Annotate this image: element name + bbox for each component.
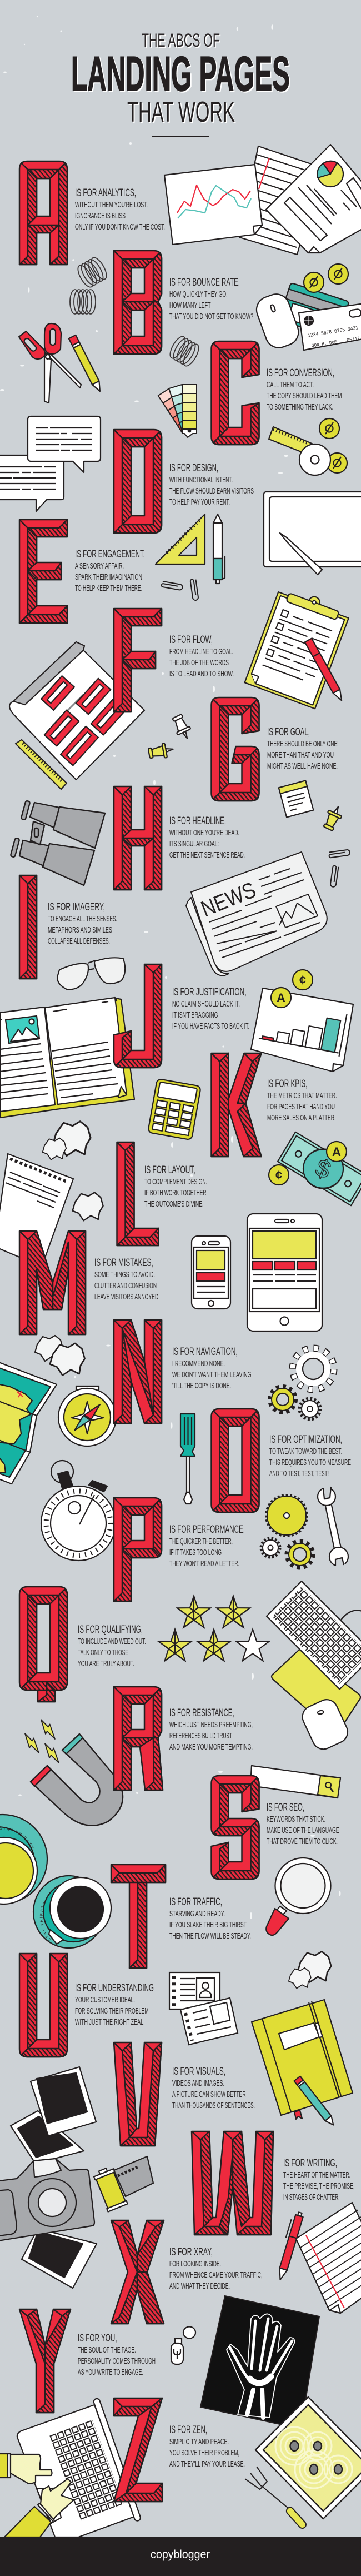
icons: polaroids xyxy=(11,2067,97,2288)
icon: magnifying glass xyxy=(266,1858,331,1935)
text: V: A PICTURE CAN SHOW BETTER xyxy=(172,2090,246,2099)
letter M xyxy=(19,1231,86,1334)
icon: red pencil xyxy=(305,639,345,702)
computer mouse xyxy=(253,291,302,351)
illustration: analytics papers xyxy=(164,145,361,255)
icon: large phone xyxy=(247,1214,322,1331)
text: L xyxy=(144,1164,207,1209)
text: B: HOW MANY LEFT xyxy=(169,301,211,310)
text: Q: TO INCLUDE AND WEED OUT. xyxy=(78,1637,146,1646)
title xyxy=(71,30,291,129)
text: C xyxy=(267,367,342,412)
icon: search bar xyxy=(250,1766,340,1798)
icons: crumpled paper xyxy=(35,1122,331,1989)
text: J xyxy=(172,986,249,1031)
text: G: IS FOR GOAL, xyxy=(267,726,310,738)
letter R xyxy=(114,1687,163,1790)
letter T xyxy=(111,1865,166,1968)
text: M: IS FOR MISTAKES, xyxy=(94,1257,153,1269)
text: I: TO ENGAGE ALL THE SENSES. xyxy=(48,915,117,924)
icon: film roll xyxy=(93,2156,153,2212)
text: F: IS FOR FLOW, xyxy=(169,634,213,646)
text: Y: IS FOR YOU, xyxy=(78,2333,117,2344)
icon: wrench xyxy=(318,1485,348,1568)
icon: tape measure with coins xyxy=(269,418,347,475)
letter E xyxy=(19,520,67,623)
text: V: IS FOR VISUALS, xyxy=(172,2066,225,2077)
back bubble xyxy=(0,455,64,511)
text: Y: THE SOUL OF THE PAGE. xyxy=(78,2346,136,2355)
text: P: THE QUICKER THE BETTER. xyxy=(169,1537,233,1546)
text: Q: TALK ONLY TO THOSE xyxy=(78,1648,128,1657)
mouse pad xyxy=(272,1650,360,1723)
text: A: ONLY IF YOU DON'T KNOW THE COST. xyxy=(75,223,165,232)
icon: lightning bolts xyxy=(25,1717,59,1765)
text: D xyxy=(169,462,254,507)
text: J: NO CLAIM SHOULD LACK IT. xyxy=(172,1000,240,1009)
icon: magnet xyxy=(31,1734,123,1826)
text: Q: YOU ARE TRULY ABOUT. xyxy=(78,1660,134,1668)
letter D xyxy=(114,430,162,533)
text: W xyxy=(283,2158,354,2202)
icon: set square xyxy=(156,514,205,564)
icon: speech bubbles xyxy=(0,416,101,511)
icon: springs xyxy=(70,255,202,368)
text: P: IF IT TAKES TOO LONG xyxy=(169,1548,222,1557)
icon: bar chart document xyxy=(251,970,353,1072)
letter A xyxy=(19,161,67,265)
text: D: THE FLOW SHOULD EARN VISITORS xyxy=(169,487,254,496)
text: V xyxy=(172,2066,255,2110)
text: Y: PERSONALITY COMES THROUGH xyxy=(78,2357,156,2366)
text: U xyxy=(75,1982,154,2027)
icon: tea cup: STAY THIRSTY xyxy=(0,1827,34,1847)
icon: gears xyxy=(262,1348,334,1567)
letter X xyxy=(111,2220,164,2324)
text: Q xyxy=(78,1624,146,1668)
icon: tablet and stylus xyxy=(264,492,361,575)
text: D: IS FOR DESIGN, xyxy=(169,462,218,474)
text: S xyxy=(267,1802,339,1846)
icon: screwdriver xyxy=(180,1414,195,1504)
icon: rating stars xyxy=(158,1596,269,1661)
text: K: IS FOR KPIS, xyxy=(267,1078,308,1090)
text: Z: IS FOR ZEN, xyxy=(169,2424,207,2436)
text: H xyxy=(169,815,245,860)
icon: coffee cup: STAY THIRSTY xyxy=(40,1902,51,1941)
credit card: 05/17 xyxy=(347,336,360,343)
icon: note xyxy=(279,780,313,818)
text: L: THE OUTCOME'S DIVINE. xyxy=(144,1200,203,1209)
text: B: HOW QUICKLY THEY GO. xyxy=(169,290,228,299)
icon: tea cup xyxy=(0,1814,48,1905)
text: M: SOME THINGS TO AVOID. xyxy=(94,1270,155,1279)
text: F: THE JOB OF THE WORDS xyxy=(169,659,229,667)
footer: copyblogger xyxy=(151,2548,210,2561)
cable xyxy=(339,1611,361,1623)
front bubble xyxy=(28,416,101,472)
letter K xyxy=(211,1053,261,1157)
icon: pen xyxy=(213,514,225,584)
lined paper xyxy=(239,146,344,255)
text: R: AND MAKE YOU MORE TEMPTING. xyxy=(169,1743,253,1752)
text: P: THEY WON'T READ A LETTER. xyxy=(169,1559,239,1568)
text: Q: IS FOR QUALIFYING, xyxy=(78,1624,143,1636)
letter Y xyxy=(19,2309,71,2413)
text: A: IS FOR ANALYTICS, xyxy=(75,187,136,199)
icon: bar chart document: ¢ xyxy=(299,973,306,987)
icon: usb stick xyxy=(171,2339,183,2364)
text: T: IF YOU SLAKE THEIR BIG THIRST xyxy=(169,1921,247,1930)
mouse xyxy=(299,1696,352,1753)
text: B: IS FOR BOUNCE RATE, xyxy=(169,277,240,288)
icon: plate of noodles xyxy=(255,2397,361,2519)
icon: laptop xyxy=(17,2398,141,2537)
letter O xyxy=(211,1409,259,1512)
letter Z xyxy=(114,2398,162,2502)
text: T: THEN THE FLOW WILL BE STEADY. xyxy=(169,1932,251,1941)
line chart paper xyxy=(164,165,262,245)
text: C: CALL THEM TO ACT. xyxy=(267,381,314,390)
title: THE ABCS OF xyxy=(143,31,221,52)
icon: fork xyxy=(245,2467,308,2530)
icon: stopwatch xyxy=(41,1461,116,1561)
letter J xyxy=(114,964,162,1068)
text: Z: YOU SOLVE THEIR PROBLEM, xyxy=(169,2449,239,2458)
text: L: IS FOR LAYOUT, xyxy=(144,1164,195,1176)
icon: yellow pencil xyxy=(69,335,103,393)
text: D: WITH FUNCTIONAL INTENT. xyxy=(169,476,233,485)
text: K xyxy=(267,1078,337,1123)
text: R: WHICH JUST NEEDS PREEMPTING, xyxy=(169,1721,253,1730)
text: F xyxy=(169,634,234,679)
text: I: METAPHORS AND SIMILES xyxy=(48,926,112,935)
text: M: LEAVE VISITORS ANNOYED. xyxy=(94,1293,160,1302)
text: E xyxy=(75,549,145,593)
text: R xyxy=(169,1707,253,1752)
icon: small phone xyxy=(192,1236,230,1309)
text: A: IGNORANCE IS BLISS xyxy=(75,212,126,221)
letter I xyxy=(19,875,37,979)
title: THE ABCS OF xyxy=(142,30,220,51)
icon: treasure map xyxy=(0,1362,57,1484)
text: E: A SENSORY AFFAIR. xyxy=(75,562,124,571)
text: I xyxy=(48,901,117,946)
coins xyxy=(304,264,348,292)
icon: lined paper xyxy=(296,2203,361,2313)
teal card xyxy=(279,283,349,338)
text: L: IF BOTH WORK TOGETHER xyxy=(144,1189,207,1198)
text: V: VIDEOS AND IMAGES. xyxy=(172,2079,224,2088)
letter L xyxy=(117,1142,159,1245)
icon: notepad xyxy=(0,1154,73,1258)
icon: binoculars xyxy=(11,801,105,885)
text: H: GET THE NEXT SENTENCE READ. xyxy=(169,851,245,860)
icon: red pen xyxy=(274,2211,304,2281)
letter H xyxy=(114,786,162,890)
icon: cards mouse and coins xyxy=(253,264,361,351)
text: U: WITH JUST THE RIGHT ZEAL. xyxy=(75,2018,145,2027)
text: P xyxy=(169,1524,245,1568)
text: L: TO COMPLEMENT DESIGN. xyxy=(144,1178,207,1187)
letter B xyxy=(114,251,162,354)
icon: saw blade xyxy=(267,1496,306,1535)
keyboard xyxy=(267,1581,361,1690)
text: U: FOR SOLVING THEIR PROBLEM xyxy=(75,2007,149,2016)
icon: dollar bill: ¢ xyxy=(275,1168,282,1182)
text: E: SPARK THEIR IMAGINATION xyxy=(75,573,142,582)
icon: compass xyxy=(58,1386,116,1446)
text: V: THAN THOUSANDS OF SENTENCES. xyxy=(172,2101,255,2110)
text: E: TO HELP KEEP THEM THERE. xyxy=(75,584,142,593)
letter P xyxy=(114,1498,162,1601)
text: J: IF YOU HAVE FACTS TO BACK IT. xyxy=(172,1022,249,1031)
icon: clipboard xyxy=(245,584,352,709)
text: E: IS FOR ENGAGEMENT, xyxy=(75,549,145,560)
text: Z: SIMPLICITY AND PEACE. xyxy=(169,2438,229,2447)
letter U xyxy=(19,1954,67,2057)
letter G xyxy=(211,697,259,801)
text: N xyxy=(172,1346,252,1391)
icon: camera xyxy=(0,2159,94,2241)
text: F: IS TO LEAD AND TO SHOW. xyxy=(169,670,234,679)
text: M xyxy=(94,1257,160,1302)
text: O xyxy=(269,1434,351,1478)
text: U: IS FOR UNDERSTANDING xyxy=(75,1982,154,1994)
icon: bar chart document: A xyxy=(277,991,285,1005)
icon: glasses xyxy=(57,958,125,989)
text: I: COLLAPSE ALL DEFENSES. xyxy=(48,937,110,946)
icon: notebook xyxy=(252,2000,353,2119)
text: N: I RECOMMEND NONE. xyxy=(172,1359,225,1368)
icons: profile cards xyxy=(169,1972,238,2045)
letter F xyxy=(114,609,162,712)
text: N: IS FOR NAVIGATION, xyxy=(172,1346,238,1358)
letter S xyxy=(211,1776,259,1879)
icon: pebble xyxy=(183,2326,195,2339)
icon: open book xyxy=(0,998,134,1118)
title rule xyxy=(152,136,209,137)
text: D: TO HELP PAY YOUR RENT. xyxy=(169,498,230,507)
footer xyxy=(0,2537,361,2576)
text: R: IS FOR RESISTANCE, xyxy=(169,1707,234,1719)
specks xyxy=(0,16,341,1919)
text: X xyxy=(169,2246,262,2291)
letter N xyxy=(114,1320,162,1423)
icon: newspaper: NEWS xyxy=(198,878,259,921)
icon: blueprint xyxy=(9,642,144,780)
icon: teal pencil xyxy=(294,2076,337,2127)
text: T: IS FOR TRAFFIC, xyxy=(169,1896,222,1908)
text: Y xyxy=(78,2333,156,2377)
text: S: IS FOR SEO, xyxy=(267,1802,304,1813)
text: F: FROM HEADLINE TO GOAL. xyxy=(169,647,233,656)
text: X: FROM WHENCE CAME YOUR TRAFFIC, xyxy=(169,2271,262,2280)
text: T: STARVING AND READY. xyxy=(169,1910,225,1919)
icon: colour swatches xyxy=(158,385,197,437)
icon: paper clips xyxy=(161,579,350,887)
text: T xyxy=(169,1896,251,1941)
credit card xyxy=(299,302,361,350)
text: N: 'TILL THE COPY IS DONE. xyxy=(172,1382,231,1391)
text: A: WITHOUT THEM YOU'RE LOST. xyxy=(75,201,148,210)
text: I: IS FOR IMAGERY, xyxy=(48,901,105,913)
icon: mouse pad keyboard and mouse xyxy=(267,1581,361,1753)
text: M: CLUTTER AND CONFUSION xyxy=(94,1282,157,1291)
letter V xyxy=(114,2042,162,2146)
letter C xyxy=(211,341,259,445)
text: X: AND WHAT THEY DECIDE. xyxy=(169,2282,230,2291)
text: U: YOUR CUSTOMER IDEAL. xyxy=(75,1996,135,2005)
text: X: FOR LOOKING INSIDE. xyxy=(169,2260,221,2269)
letter W xyxy=(192,2131,273,2235)
icon: scissors xyxy=(19,323,81,403)
icon: x-ray xyxy=(200,2296,319,2424)
icon: push pins xyxy=(148,713,345,832)
text: P: IS FOR PERFORMANCE, xyxy=(169,1524,245,1536)
icon: coffee cup xyxy=(32,1875,112,1949)
credit card: JON H. DOE xyxy=(311,340,337,349)
text: N: WE DON'T WANT THEM LEAVING xyxy=(172,1371,252,1379)
icon: ruler xyxy=(16,740,67,789)
text: G xyxy=(267,726,339,771)
text: Y: AS YOU WRITE TO ENGAGE. xyxy=(78,2368,143,2377)
text: R: REFERENCES BUILD TRUST xyxy=(169,1732,232,1741)
letter Q xyxy=(19,1587,67,1702)
text: H: IS FOR HEADLINE, xyxy=(169,815,226,827)
text: B: THAT YOU DID NOT GET TO KNOW? xyxy=(169,312,253,321)
text: J: IS FOR JUSTIFICATION, xyxy=(172,986,247,998)
title: THAT WORK xyxy=(128,97,236,129)
text: B xyxy=(169,277,253,321)
icon: dollar bill: A xyxy=(332,1145,341,1159)
text: Z xyxy=(169,2424,245,2469)
icon: dollar bill: $ xyxy=(312,1154,334,1184)
icon: calculator xyxy=(148,1079,201,1140)
text: A xyxy=(75,187,165,232)
pie chart document xyxy=(266,145,361,253)
title: THAT WORK xyxy=(127,96,235,128)
text: H: WITHOUT ONE YOU'RE DEAD. xyxy=(169,829,239,838)
icon: newspaper xyxy=(186,852,327,975)
icon: dollar bill xyxy=(269,1124,361,1214)
text: H: ITS SINGULAR GOAL: xyxy=(169,840,219,849)
icon: hands xyxy=(0,2454,74,2537)
text: J: IT ISN'T BRAGGING xyxy=(172,1011,218,1020)
text: X: IS FOR XRAY, xyxy=(169,2246,213,2258)
text: Z: AND THEY'LL PAY YOUR LEASE. xyxy=(169,2460,245,2469)
